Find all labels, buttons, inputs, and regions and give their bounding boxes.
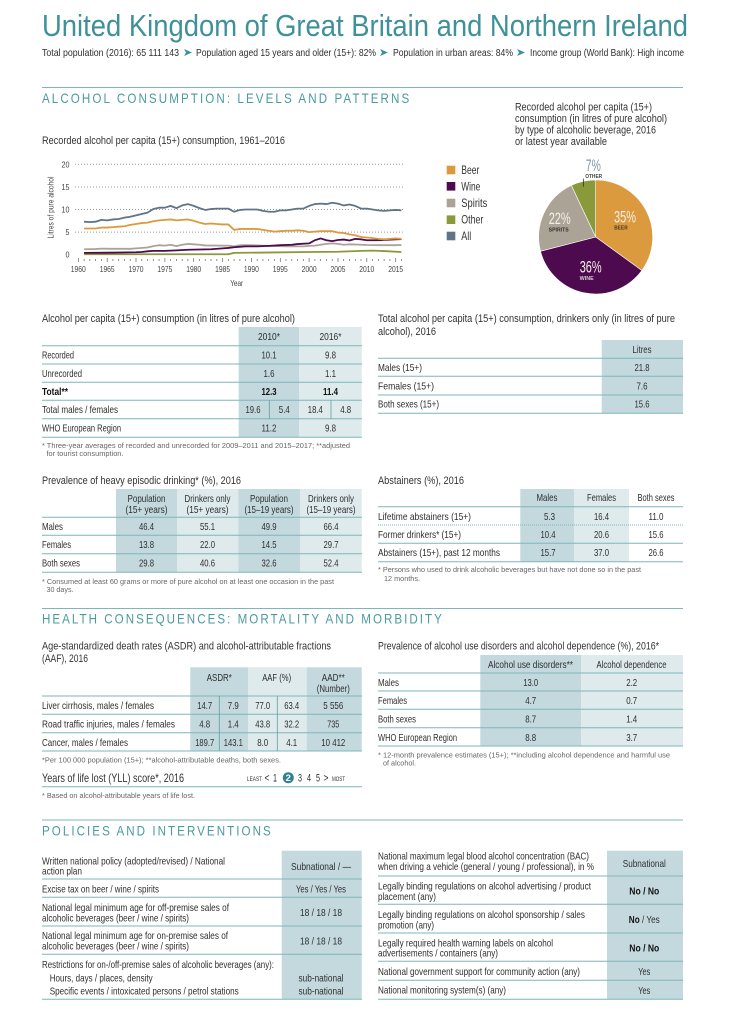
chart grid lines and y axis labels: 20 bbox=[62, 160, 70, 170]
table text: 8.7 bbox=[525, 714, 536, 726]
table text: 13.8 bbox=[139, 539, 154, 551]
table text: Legally binding regulations on alcohol sponsorship / sales bbox=[378, 909, 585, 921]
table text bbox=[377, 850, 666, 997]
table text: 19.6 bbox=[246, 404, 261, 416]
x axis labels: 2010 bbox=[359, 264, 375, 274]
table shading bbox=[520, 489, 629, 562]
table shading bbox=[239, 327, 362, 437]
pie labels: 36% bbox=[580, 258, 602, 277]
slice: spirits 22% bbox=[539, 185, 596, 251]
table text: Litres bbox=[632, 344, 652, 356]
score scale: LEAST bbox=[247, 777, 262, 783]
table text: 43.8 bbox=[255, 718, 270, 730]
table title: (AAF), 2016 bbox=[42, 653, 88, 665]
table text: 46.4 bbox=[139, 521, 154, 533]
panel: drinkers only table bbox=[378, 313, 683, 413]
table text: Females bbox=[42, 539, 71, 551]
table shading bbox=[607, 851, 683, 999]
table text: Restrictions for on-/off-premise sales of alcoholic beverages (any): bbox=[42, 959, 274, 971]
chart grid lines and y axis labels: 0 bbox=[66, 250, 70, 260]
table text: Recorded bbox=[42, 350, 74, 362]
table text: 5.3 bbox=[544, 511, 555, 523]
table text: 11.2 bbox=[262, 422, 277, 434]
table text: Females bbox=[587, 492, 616, 504]
x axis labels: 2000 bbox=[302, 264, 317, 274]
table text bbox=[42, 856, 351, 998]
table text: 13.0 bbox=[523, 677, 538, 689]
panel: policies right table bbox=[377, 850, 683, 999]
table rules bbox=[378, 507, 683, 562]
table title bbox=[378, 313, 675, 338]
table text: 11.0 bbox=[648, 511, 664, 523]
score scale: 4 bbox=[307, 772, 311, 784]
table text bbox=[378, 659, 667, 744]
x axis labels: 1985 bbox=[215, 264, 230, 274]
table text: 18 / 18 / 18 bbox=[300, 936, 342, 948]
x axis labels: 2015 bbox=[388, 264, 403, 274]
table text: Males (15+) bbox=[378, 362, 422, 374]
pie labels: BEER bbox=[614, 226, 628, 232]
table text: Lifetime abstainers (15+) bbox=[378, 511, 471, 523]
table text: alcoholic beverages (beer / wine / spirits) bbox=[42, 912, 189, 924]
table text: AAF (%) bbox=[262, 672, 291, 684]
table text: 2.2 bbox=[626, 677, 637, 689]
table text: National maximum legal blood alcohol concentration (BAC) bbox=[378, 850, 589, 862]
slice: wine 36% bbox=[540, 237, 642, 294]
table footnote bbox=[42, 579, 334, 594]
score footnote: * Based on alcohol-attributable years of life lost. bbox=[42, 793, 195, 800]
table text: AAD** bbox=[322, 672, 345, 684]
table rules bbox=[42, 517, 362, 572]
table text: Males bbox=[536, 492, 558, 504]
table shading bbox=[282, 851, 362, 999]
table footnote bbox=[378, 752, 670, 768]
table text: 7.6 bbox=[636, 380, 648, 392]
table text: 15.6 bbox=[634, 398, 650, 410]
table text: Females (15+) bbox=[378, 380, 434, 392]
table text: National legal minimum age for off-premise sales of bbox=[42, 902, 229, 914]
pie labels: 22% bbox=[549, 209, 571, 228]
score scale: > bbox=[324, 772, 328, 784]
table text: 11.4 bbox=[323, 386, 338, 398]
pie labels: 7% bbox=[586, 156, 601, 175]
table rules bbox=[42, 879, 362, 999]
table text: (15–19 years) bbox=[244, 504, 294, 516]
table title: Prevalence of heavy episodic drinking* (%), 2016 bbox=[42, 475, 241, 487]
chart grid lines and y axis labels: 10 bbox=[62, 204, 70, 214]
table footnote: * Consumed at least 60 grams or more of pure alcohol on at least one occasion in the past bbox=[42, 579, 334, 586]
table title: Age-standardized death rates (ASDR) and alcohol-attributable fractions bbox=[42, 640, 331, 652]
table footnote: of alcohol. bbox=[383, 760, 416, 768]
pie labels: WINE bbox=[580, 276, 594, 282]
table text: Females bbox=[378, 695, 407, 707]
table text: 2016* bbox=[320, 331, 342, 343]
panel: heavy episodic drinking table bbox=[42, 475, 362, 594]
table text: (15+ years) bbox=[186, 504, 228, 516]
table text: 4.8 bbox=[340, 404, 351, 416]
table text: sub-national bbox=[298, 986, 344, 998]
table text bbox=[42, 331, 351, 434]
table text: 29.7 bbox=[324, 539, 339, 551]
x axis labels: Year bbox=[230, 278, 243, 288]
x axis labels: 1960 bbox=[71, 264, 86, 274]
table text: 9.8 bbox=[325, 422, 336, 434]
pie labels: 35% bbox=[614, 208, 636, 227]
country facts line: Population in urban areas: 84% bbox=[393, 47, 513, 59]
table text: advertisements / containers (any) bbox=[378, 948, 498, 960]
table footnote: * Three-year averages of recorded and unrecorded for 2009–2011 and 2015–2017; **adjusted bbox=[42, 443, 350, 450]
table text: 29.8 bbox=[139, 558, 154, 570]
x axis labels: 1995 bbox=[273, 264, 288, 274]
line: all bbox=[84, 203, 401, 222]
panel: death rates table bbox=[42, 640, 362, 764]
table text: Excise tax on beer / wine / spirits bbox=[42, 884, 159, 896]
pie labels: OTHER bbox=[585, 174, 603, 180]
table title: Prevalence of alcohol use disorders and alcohol dependence (%), 2016* bbox=[378, 640, 660, 652]
table text: Population bbox=[250, 493, 288, 505]
chart title: Recorded alcohol per capita (15+) consumption, 1961–2016 bbox=[42, 135, 285, 147]
table text: Males bbox=[42, 521, 63, 533]
table text: 4.1 bbox=[286, 737, 297, 749]
table text: Subnational / — bbox=[291, 861, 351, 873]
country facts line: Population aged 15 years and older (15+): 82% bbox=[196, 47, 376, 59]
table text: 66.4 bbox=[324, 521, 339, 533]
score scale: 5 bbox=[316, 772, 320, 784]
table text: 21.8 bbox=[634, 362, 650, 374]
table text: 14.5 bbox=[262, 539, 277, 551]
table text: 735 bbox=[327, 718, 339, 730]
x axis labels: 2005 bbox=[330, 264, 346, 274]
table text: Legally binding regulations on alcohol advertising / product bbox=[378, 880, 591, 892]
table text: No / Yes bbox=[629, 914, 660, 926]
table text: Former drinkers* (15+) bbox=[378, 529, 461, 541]
table text: 10.1 bbox=[262, 350, 277, 362]
legend: All bbox=[461, 229, 471, 243]
table text: National monitoring system(s) (any) bbox=[378, 984, 506, 996]
table text: Liver cirrhosis, males / females bbox=[42, 700, 154, 712]
table text: 32.6 bbox=[262, 558, 277, 570]
table text: 4.8 bbox=[199, 718, 210, 730]
score title: Years of life lost (YLL) score*, 2016 bbox=[42, 771, 184, 785]
table text: Both sexes bbox=[378, 714, 416, 726]
table text: 77.0 bbox=[255, 700, 270, 712]
table text: 2010* bbox=[258, 331, 280, 343]
table text: 20.6 bbox=[594, 529, 609, 541]
y axis title: Litres of pure alcohol bbox=[46, 176, 56, 238]
panel: alcohol per capita table bbox=[42, 313, 362, 458]
table text: Specific events / intoxicated persons / petrol stations bbox=[50, 986, 239, 998]
data lines bbox=[84, 203, 401, 254]
panel: line chart bbox=[42, 135, 405, 288]
slice: other 7% bbox=[571, 180, 596, 237]
table title: alcohol), 2016 bbox=[378, 326, 436, 338]
table text bbox=[378, 344, 652, 410]
table text: Males bbox=[378, 677, 399, 689]
country facts line: Income group (World Bank): High income bbox=[530, 47, 684, 59]
table text: 1.4 bbox=[228, 718, 239, 730]
table text: Both sexes bbox=[638, 492, 674, 504]
table footnote: for tourist consumption. bbox=[46, 451, 124, 458]
table rules bbox=[42, 696, 362, 751]
pie title: consumption (in litres of pure alcohol) bbox=[515, 113, 667, 125]
pie title: Recorded alcohol per capita (15+) bbox=[515, 102, 652, 114]
panel: policies left table bbox=[42, 851, 362, 999]
table text: (Number) bbox=[317, 683, 350, 695]
table text: WHO European Region bbox=[378, 732, 457, 744]
table text: 1.1 bbox=[325, 368, 336, 380]
table text: Both sexes (15+) bbox=[378, 398, 439, 410]
panel: abstainers table bbox=[378, 475, 683, 583]
legend: Other bbox=[461, 213, 483, 227]
table text bbox=[378, 492, 674, 559]
table rules bbox=[378, 358, 683, 413]
table footnote bbox=[378, 567, 641, 583]
legend: Spirits bbox=[461, 196, 487, 210]
table text: 15.7 bbox=[540, 547, 556, 559]
table text: No / No bbox=[629, 886, 659, 898]
line: other bbox=[84, 251, 401, 254]
pie labels: SPIRITS bbox=[549, 228, 569, 234]
table text: 1.6 bbox=[264, 368, 275, 380]
section: alcohol consumption heading: ALCOHOL CONSUMPTION: LEVELS AND PATTERNS bbox=[42, 91, 409, 106]
table text bbox=[42, 493, 356, 570]
table title: Abstainers (%), 2016 bbox=[378, 475, 464, 487]
table text: 37.0 bbox=[594, 547, 609, 559]
table rules bbox=[42, 346, 362, 437]
table text: Cancer, males / females bbox=[42, 737, 128, 749]
x axis labels: 1970 bbox=[128, 264, 144, 274]
table title bbox=[42, 640, 331, 665]
score scale: 2 bbox=[286, 773, 291, 784]
line: beer bbox=[84, 219, 401, 239]
table text: (15–19 years) bbox=[306, 504, 356, 516]
table text: sub-national bbox=[298, 972, 344, 984]
score scale bbox=[247, 772, 345, 784]
legend: Wine bbox=[461, 179, 481, 193]
table text: National government support for community action (any) bbox=[378, 966, 580, 978]
table text: WHO European Region bbox=[42, 422, 121, 434]
table text: placement (any) bbox=[378, 891, 436, 903]
table text: Unrecorded bbox=[42, 368, 82, 380]
section: health consequences heading: HEALTH CONSEQUENCES: MORTALITY AND MORBIDITY bbox=[42, 612, 442, 627]
table text: Abstainers (15+), past 12 months bbox=[378, 547, 500, 559]
x axis labels bbox=[71, 264, 403, 288]
table text: 40.6 bbox=[200, 558, 215, 570]
table text: ASDR* bbox=[207, 672, 232, 684]
table text: promotion (any) bbox=[378, 920, 434, 932]
country facts line: Total population (2016): 65 111 143 bbox=[42, 47, 179, 59]
x axis labels: 1980 bbox=[186, 264, 201, 274]
table text: 15.6 bbox=[648, 529, 664, 541]
legend: Beer bbox=[461, 163, 479, 177]
table footnote: 12 months. bbox=[384, 576, 420, 583]
table text: 7.9 bbox=[228, 700, 239, 712]
panel: pie chart bbox=[515, 102, 667, 294]
pie title bbox=[515, 102, 667, 148]
table text: 3.7 bbox=[626, 732, 637, 744]
table footnote: 30 days. bbox=[46, 587, 74, 594]
line: wine bbox=[84, 238, 401, 253]
table text: Alcohol use disorders** bbox=[488, 659, 573, 671]
table footnote: * 12-month prevalence estimates (15+); **including alcohol dependence and harmful use bbox=[378, 752, 670, 760]
table text: Yes bbox=[638, 966, 650, 978]
table text: alcoholic beverages (beer / wine / spirits) bbox=[42, 940, 189, 952]
x axis ticks bbox=[78, 258, 401, 262]
table text: 5 556 bbox=[323, 700, 343, 712]
table text: National legal minimum age for on-premise sales of bbox=[42, 930, 228, 942]
table text: 1.4 bbox=[626, 714, 637, 726]
chart grid lines and y axis labels bbox=[62, 160, 405, 260]
table text: Total** bbox=[42, 386, 69, 398]
table text: 8.8 bbox=[525, 732, 536, 744]
table shading bbox=[602, 340, 683, 413]
table text: 14.7 bbox=[197, 700, 212, 712]
panel: alcohol use disorders table bbox=[378, 640, 683, 768]
pie title: or latest year available bbox=[515, 136, 607, 148]
x axis labels: 1975 bbox=[157, 264, 173, 274]
table shading bbox=[480, 655, 683, 746]
table text: Drinkers only bbox=[308, 493, 355, 505]
table footnote: * Persons who used to drink alcoholic beverages but have not done so in the past bbox=[378, 567, 641, 574]
table title: Alcohol per capita (15+) consumption (in litres of pure alcohol) bbox=[42, 313, 295, 325]
section: policies heading: POLICIES AND INTERVENTIONS bbox=[42, 824, 271, 839]
score scale: < bbox=[264, 772, 270, 784]
table text: No / No bbox=[629, 942, 659, 954]
x axis labels: 1965 bbox=[100, 264, 115, 274]
score scale: MOST bbox=[332, 777, 345, 783]
legend bbox=[447, 163, 487, 243]
table text: Written national policy (adopted/revised) / National bbox=[42, 856, 225, 868]
table text: 8.0 bbox=[257, 737, 268, 749]
table text: action plan bbox=[42, 866, 82, 878]
table text: 63.4 bbox=[284, 700, 299, 712]
table rules bbox=[378, 876, 683, 999]
table text: 18.4 bbox=[308, 404, 323, 416]
table text: 12.3 bbox=[262, 386, 277, 398]
table text: 49.9 bbox=[262, 521, 277, 533]
pie labels bbox=[549, 156, 636, 282]
table shading bbox=[190, 667, 362, 751]
table text: 52.4 bbox=[324, 558, 339, 570]
table text: 10 412 bbox=[321, 737, 345, 749]
score scale: 3 bbox=[298, 772, 302, 784]
table shading bbox=[116, 489, 362, 572]
table text: Legally required health warning labels on alcohol bbox=[378, 938, 553, 950]
table text: 18 / 18 / 18 bbox=[300, 907, 342, 919]
table text: Drinkers only bbox=[184, 493, 231, 505]
table text: Total males / females bbox=[42, 404, 118, 416]
chart grid lines and y axis labels: 5 bbox=[66, 227, 70, 237]
table rules bbox=[378, 673, 683, 746]
table text bbox=[42, 672, 350, 749]
table text: 189.7 bbox=[195, 737, 214, 749]
table text: 55.1 bbox=[200, 521, 215, 533]
table title: Total alcohol per capita (15+) consumption, drinkers only (in litres of pure bbox=[378, 313, 675, 325]
score scale: 1 bbox=[273, 772, 277, 784]
table text: (15+ years) bbox=[126, 504, 168, 516]
table text: Subnational bbox=[623, 858, 666, 870]
table text: Yes bbox=[638, 985, 650, 997]
country facts line bbox=[42, 47, 684, 59]
chart grid lines and y axis labels: 15 bbox=[62, 182, 70, 192]
panel: years of life lost score bbox=[42, 771, 362, 800]
table text: 32.2 bbox=[284, 718, 299, 730]
slice: beer 35% bbox=[596, 180, 653, 270]
x axis labels: 1990 bbox=[244, 264, 259, 274]
table text: 26.6 bbox=[648, 547, 664, 559]
table text: 5.4 bbox=[279, 404, 290, 416]
table text: 22.0 bbox=[200, 539, 215, 551]
table text: 143.1 bbox=[224, 737, 243, 749]
table text: Yes / Yes / Yes bbox=[296, 884, 346, 896]
table footnote: *Per 100 000 population (15+); **alcohol-attributable deaths, both sexes. bbox=[42, 758, 281, 764]
table text: Road traffic injuries, males / females bbox=[42, 718, 175, 730]
table text: when driving a vehicle (general / young / professional), in % bbox=[377, 861, 594, 873]
table text: 4.7 bbox=[525, 695, 536, 707]
table text: Alcohol dependence bbox=[596, 659, 667, 671]
table text: 16.4 bbox=[594, 511, 609, 523]
table text: Population bbox=[128, 493, 166, 505]
line: spirits bbox=[84, 243, 401, 249]
table text: Both sexes bbox=[42, 558, 80, 570]
table footnote bbox=[42, 443, 350, 458]
table text: 10.4 bbox=[540, 529, 556, 541]
table text: 0.7 bbox=[626, 695, 637, 707]
table text: 9.8 bbox=[325, 350, 336, 362]
table text: Hours, days / places, density bbox=[50, 972, 153, 984]
pie title: by type of alcoholic beverage, 2016 bbox=[515, 124, 656, 136]
